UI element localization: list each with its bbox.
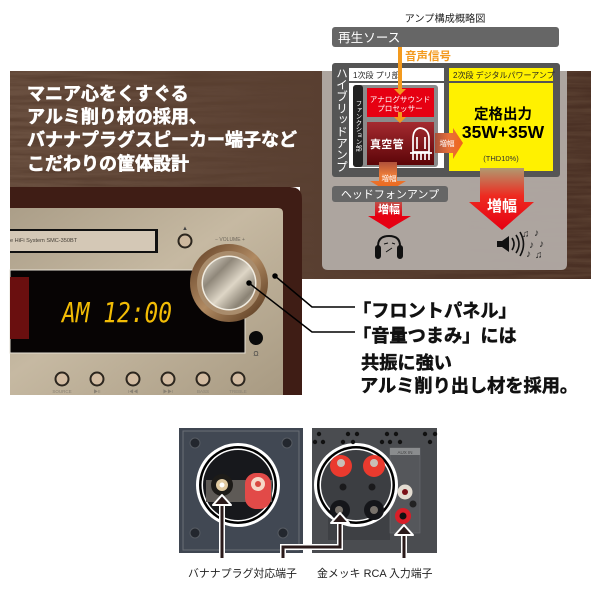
button captions: I◀◀ <box>128 389 138 394</box>
icon: speaker with music notes: ♫ <box>535 250 542 261</box>
analog sound processor: プロセッサー <box>377 104 423 113</box>
stage 1 preamp section: 1次段 プリ部 <box>353 70 400 80</box>
arrow: gold terminal connector <box>283 513 349 558</box>
bar: playback source: 再生ソース <box>338 31 400 45</box>
arrow: RCA input <box>395 525 413 558</box>
headphone jack <box>249 331 263 358</box>
analog sound processor <box>367 88 434 117</box>
icon: speaker with music notes: ♪ <box>534 228 539 239</box>
arrow: amplification to power amp: 増幅 <box>440 138 455 148</box>
display: AM 12:00 <box>60 296 172 329</box>
arrow: banana plug <box>213 495 231 558</box>
caption: gold plated RCA input: 金メッキ RCA 入力端子 <box>317 567 433 580</box>
stage 2 digital power amp: 35W+35W <box>462 122 545 142</box>
arrow: amplification to power amp <box>435 128 463 159</box>
photo: amplifier rear terminals: AUX IN <box>397 450 413 455</box>
stage 1 preamp section: ファンクション部 <box>354 100 362 152</box>
icon: speaker with music notes <box>497 228 544 261</box>
callout text: アルミ削り出し材を採用。 <box>360 376 578 396</box>
icon: speaker with music notes: ♫ <box>522 229 530 240</box>
wood background band <box>10 71 591 279</box>
arrow: amplification to headphone amp <box>370 162 406 192</box>
button captions <box>52 389 247 394</box>
bar: playback source <box>332 27 559 47</box>
stage 1 preamp section <box>349 68 444 168</box>
CD slot: e HiFi System SMC-350BT <box>10 238 78 244</box>
hybrid amp frame <box>332 63 560 177</box>
eject button <box>178 226 192 248</box>
button captions: ▶▶I <box>163 389 173 394</box>
analog sound processor: アナログサウンド <box>370 94 430 104</box>
icon: speaker with music notes: ♪ <box>539 239 544 250</box>
arrow: amplification to headphone amp: 増幅 <box>382 173 397 183</box>
arrow: headphone amplification: 増幅 <box>378 202 400 216</box>
label: audio signal: 音声信号 <box>405 49 451 63</box>
photo: amplifier rear terminals <box>312 428 437 553</box>
button captions: TREBLE <box>229 389 247 394</box>
callout text <box>353 301 578 396</box>
callout text: 共振に強い <box>361 353 452 373</box>
stage 2 digital power amp: 定格出力 <box>474 105 532 123</box>
caption: banana plug terminal: バナナプラグ対応端子 <box>188 566 297 580</box>
arrow: headphone amplification <box>368 202 411 229</box>
callout leader lines <box>247 274 355 332</box>
stage 2 digital power amp <box>449 68 555 171</box>
button captions: BASS <box>197 389 209 394</box>
icon: speaker with music notes: ♪ <box>526 249 531 260</box>
photo: speaker binding post <box>179 428 303 553</box>
headline text <box>27 84 297 174</box>
bar: headphone amp: ヘッドフォンアンプ <box>341 188 439 201</box>
headline text: バナナプラグスピーカー端子など <box>27 129 297 150</box>
stage 2 digital power amp: 2次段 デジタルパワーアンプ <box>453 70 555 80</box>
icon: headphones <box>376 236 402 258</box>
arrow: speaker amplification <box>469 168 534 230</box>
volume knob <box>190 244 268 322</box>
control buttons <box>56 372 244 386</box>
photo: front panel of audio unit <box>10 187 302 395</box>
eject button: ▲ <box>182 226 188 232</box>
vacuum tube: 真空管 <box>370 137 404 151</box>
display <box>10 270 245 353</box>
volume label: − VOLUME + <box>215 237 245 243</box>
icon: speaker with music notes: ♪ <box>529 240 534 251</box>
button captions: SOURCE <box>52 389 72 394</box>
headline text: マニア心をくすぐる <box>27 84 189 104</box>
CD slot <box>10 229 158 253</box>
stage 2 digital power amp: (THD10%) <box>483 154 519 163</box>
arrow: speaker amplification: 増幅 <box>487 197 517 215</box>
callout text: 「フロントパネル」 <box>353 301 517 321</box>
callout text: 「音量つまみ」には <box>353 326 517 346</box>
amplifier diagram title: アンプ構成概略図 <box>405 12 485 25</box>
button captions: ▶II <box>93 389 101 394</box>
orange signal arrows <box>394 47 406 123</box>
headphone jack: Ω <box>253 351 259 358</box>
bar: headphone amp <box>332 186 448 202</box>
hybrid amp frame: ハイブリッドアンプ <box>334 67 348 172</box>
headline text: アルミ削り材の採用、 <box>27 107 207 127</box>
headline text: こだわりの筐体設計 <box>27 154 189 174</box>
amplifier diagram translucent panel <box>322 71 567 270</box>
